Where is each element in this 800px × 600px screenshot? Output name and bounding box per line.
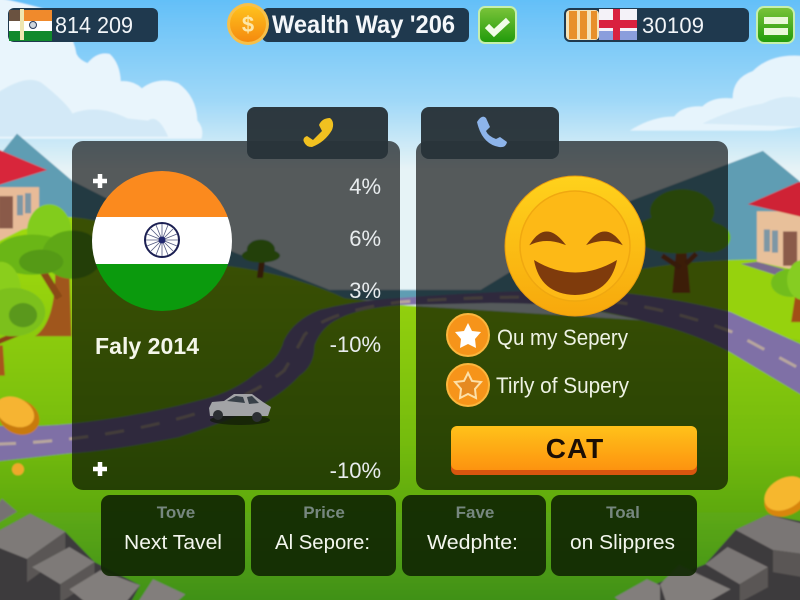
icon: dollar coin bbox=[227, 3, 269, 45]
button: CAT bbox=[451, 426, 697, 475]
card: Toal: on Slippres bbox=[570, 532, 675, 554]
top bar: left score bbox=[8, 8, 158, 42]
card: Fave: Wedphte: bbox=[427, 532, 518, 554]
right cloud bbox=[630, 56, 800, 131]
icon: smiley coin bbox=[505, 176, 645, 316]
card: Fave: Fave bbox=[456, 503, 494, 522]
house right bbox=[741, 182, 800, 276]
card: Fave bbox=[402, 495, 546, 576]
card: Price: Al Sepore: bbox=[275, 532, 370, 554]
value: 3%: 3% bbox=[349, 278, 381, 303]
icon: cross flag bbox=[599, 9, 637, 40]
stones right bbox=[615, 515, 800, 600]
left cloud bbox=[0, 0, 202, 139]
icon: india flag circle bbox=[92, 171, 232, 311]
card: Toal: Toal bbox=[606, 503, 640, 522]
tree right edge bbox=[771, 260, 800, 322]
icon: outline star badge bbox=[447, 364, 489, 406]
tab: left phone bbox=[247, 107, 388, 159]
icon: car bbox=[209, 394, 271, 425]
button: menu bbox=[757, 7, 794, 43]
value: 4%: 4% bbox=[349, 174, 381, 199]
title: Wealth Way '206: Wealth Way '206 bbox=[272, 11, 455, 39]
icon: plus top bbox=[93, 174, 107, 188]
icon: plus bottom bbox=[93, 462, 107, 476]
tree left small bbox=[0, 262, 45, 376]
label: Tirly of Supery: Tirly of Supery bbox=[496, 373, 629, 398]
button: check bbox=[479, 7, 516, 43]
icon: yellow phone bbox=[303, 118, 333, 147]
road bbox=[0, 290, 800, 461]
value: 6%: 6% bbox=[349, 226, 381, 251]
tree center small bbox=[242, 240, 280, 278]
panel: right bbox=[416, 141, 728, 490]
tree right bbox=[634, 189, 731, 293]
coin right bbox=[758, 469, 800, 525]
card: Price bbox=[251, 495, 396, 576]
coin left bbox=[0, 391, 45, 441]
card: Toal bbox=[551, 495, 697, 576]
top bar: right score bbox=[564, 8, 749, 42]
label: Qu my Sepery: Qu my Sepery bbox=[497, 325, 628, 350]
small coin bbox=[12, 463, 24, 475]
mountains bbox=[0, 134, 800, 300]
house left bbox=[0, 147, 47, 245]
hill right bbox=[541, 259, 800, 340]
card: Tove: Next Tavel bbox=[124, 532, 222, 554]
tree left large bbox=[0, 204, 103, 336]
value: 30109: 30109 bbox=[642, 13, 704, 38]
icon: dollar coin: $ bbox=[242, 12, 254, 37]
icon: striped flag bbox=[566, 10, 599, 40]
stones left bbox=[0, 499, 185, 600]
button: CAT: CAT bbox=[546, 433, 604, 464]
panel: left bbox=[72, 141, 400, 490]
card: Tove: Tove bbox=[157, 503, 195, 522]
card: Price: Price bbox=[303, 503, 345, 522]
icon: small india flag bbox=[9, 9, 52, 41]
tab: right phone bbox=[421, 107, 559, 159]
top bar: title bbox=[227, 3, 469, 45]
icon: blue phone bbox=[477, 117, 507, 147]
label: Faly 2014: Faly 2014 bbox=[95, 333, 199, 359]
card: Tove bbox=[101, 495, 245, 576]
value: 814 209: 814 209 bbox=[55, 12, 133, 38]
icon: filled star badge bbox=[447, 314, 489, 356]
value: -10% lower: -10% bbox=[330, 458, 381, 483]
hill left bbox=[0, 216, 800, 600]
value: -10% upper: -10% bbox=[330, 332, 381, 357]
